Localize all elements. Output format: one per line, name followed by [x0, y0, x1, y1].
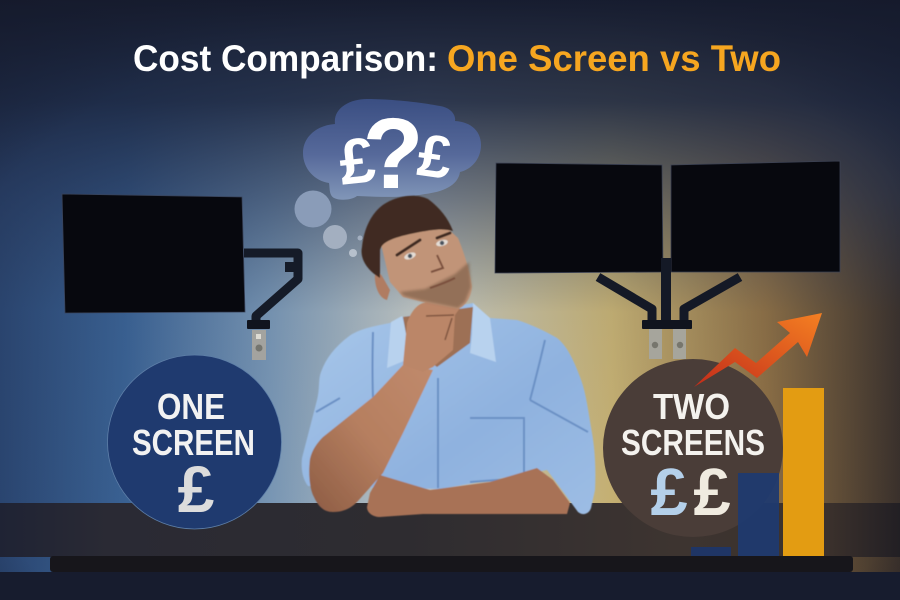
- cloud: [303, 99, 481, 200]
- small bar: [691, 547, 731, 556]
- disc: [603, 359, 783, 537]
- label: TWO: [653, 386, 730, 427]
- man: [302, 196, 595, 517]
- question mark: ?: [362, 98, 424, 210]
- desk: [0, 503, 900, 600]
- left screen: [495, 163, 663, 273]
- tall bar: [783, 388, 824, 556]
- bar chart: [691, 388, 824, 556]
- circle: two screens: SCREENS: [621, 422, 765, 463]
- base and clamp: [247, 320, 270, 329]
- pounds: £: [650, 455, 688, 530]
- title: One Screen vs Two: [447, 38, 781, 79]
- hand: [403, 302, 460, 372]
- arm: [244, 253, 298, 322]
- disc: [108, 355, 282, 529]
- shirt folds and pocket: [316, 332, 588, 488]
- stubble: [400, 262, 471, 308]
- right screen: [671, 161, 840, 272]
- arms: [598, 277, 740, 322]
- label: ONE: [157, 386, 225, 427]
- ear: [375, 273, 390, 300]
- circle: one screen: SCREEN: [132, 422, 255, 463]
- face: [380, 228, 472, 309]
- medium bar: [738, 473, 779, 556]
- circle: two screens: [603, 359, 783, 537]
- trailing bubbles: [294, 190, 332, 228]
- right pound: £: [414, 121, 456, 192]
- left forearm: [309, 365, 433, 512]
- title: Cost Comparison:: [133, 38, 438, 79]
- shirt: [302, 303, 595, 514]
- monitor: one screen with arm: [62, 194, 298, 360]
- thought bubble: [294, 98, 481, 257]
- circle: one screen: [108, 355, 282, 529]
- finger shadows: [426, 315, 454, 340]
- circle: two screens: £: [693, 455, 731, 530]
- right forearm: [367, 468, 570, 517]
- eyebrows: [397, 233, 450, 255]
- base: [642, 320, 692, 329]
- screen: [62, 194, 245, 313]
- collar: [387, 303, 496, 368]
- clamps: [649, 329, 662, 359]
- left pound: £: [336, 123, 379, 199]
- monitors: two screens with arms: [495, 161, 840, 359]
- hair: [362, 196, 453, 278]
- arrow: [694, 313, 822, 387]
- title: [133, 38, 781, 79]
- nose and mouth: [430, 255, 455, 288]
- neck: [403, 307, 473, 367]
- pound: £: [178, 452, 215, 526]
- eyes: [403, 251, 417, 261]
